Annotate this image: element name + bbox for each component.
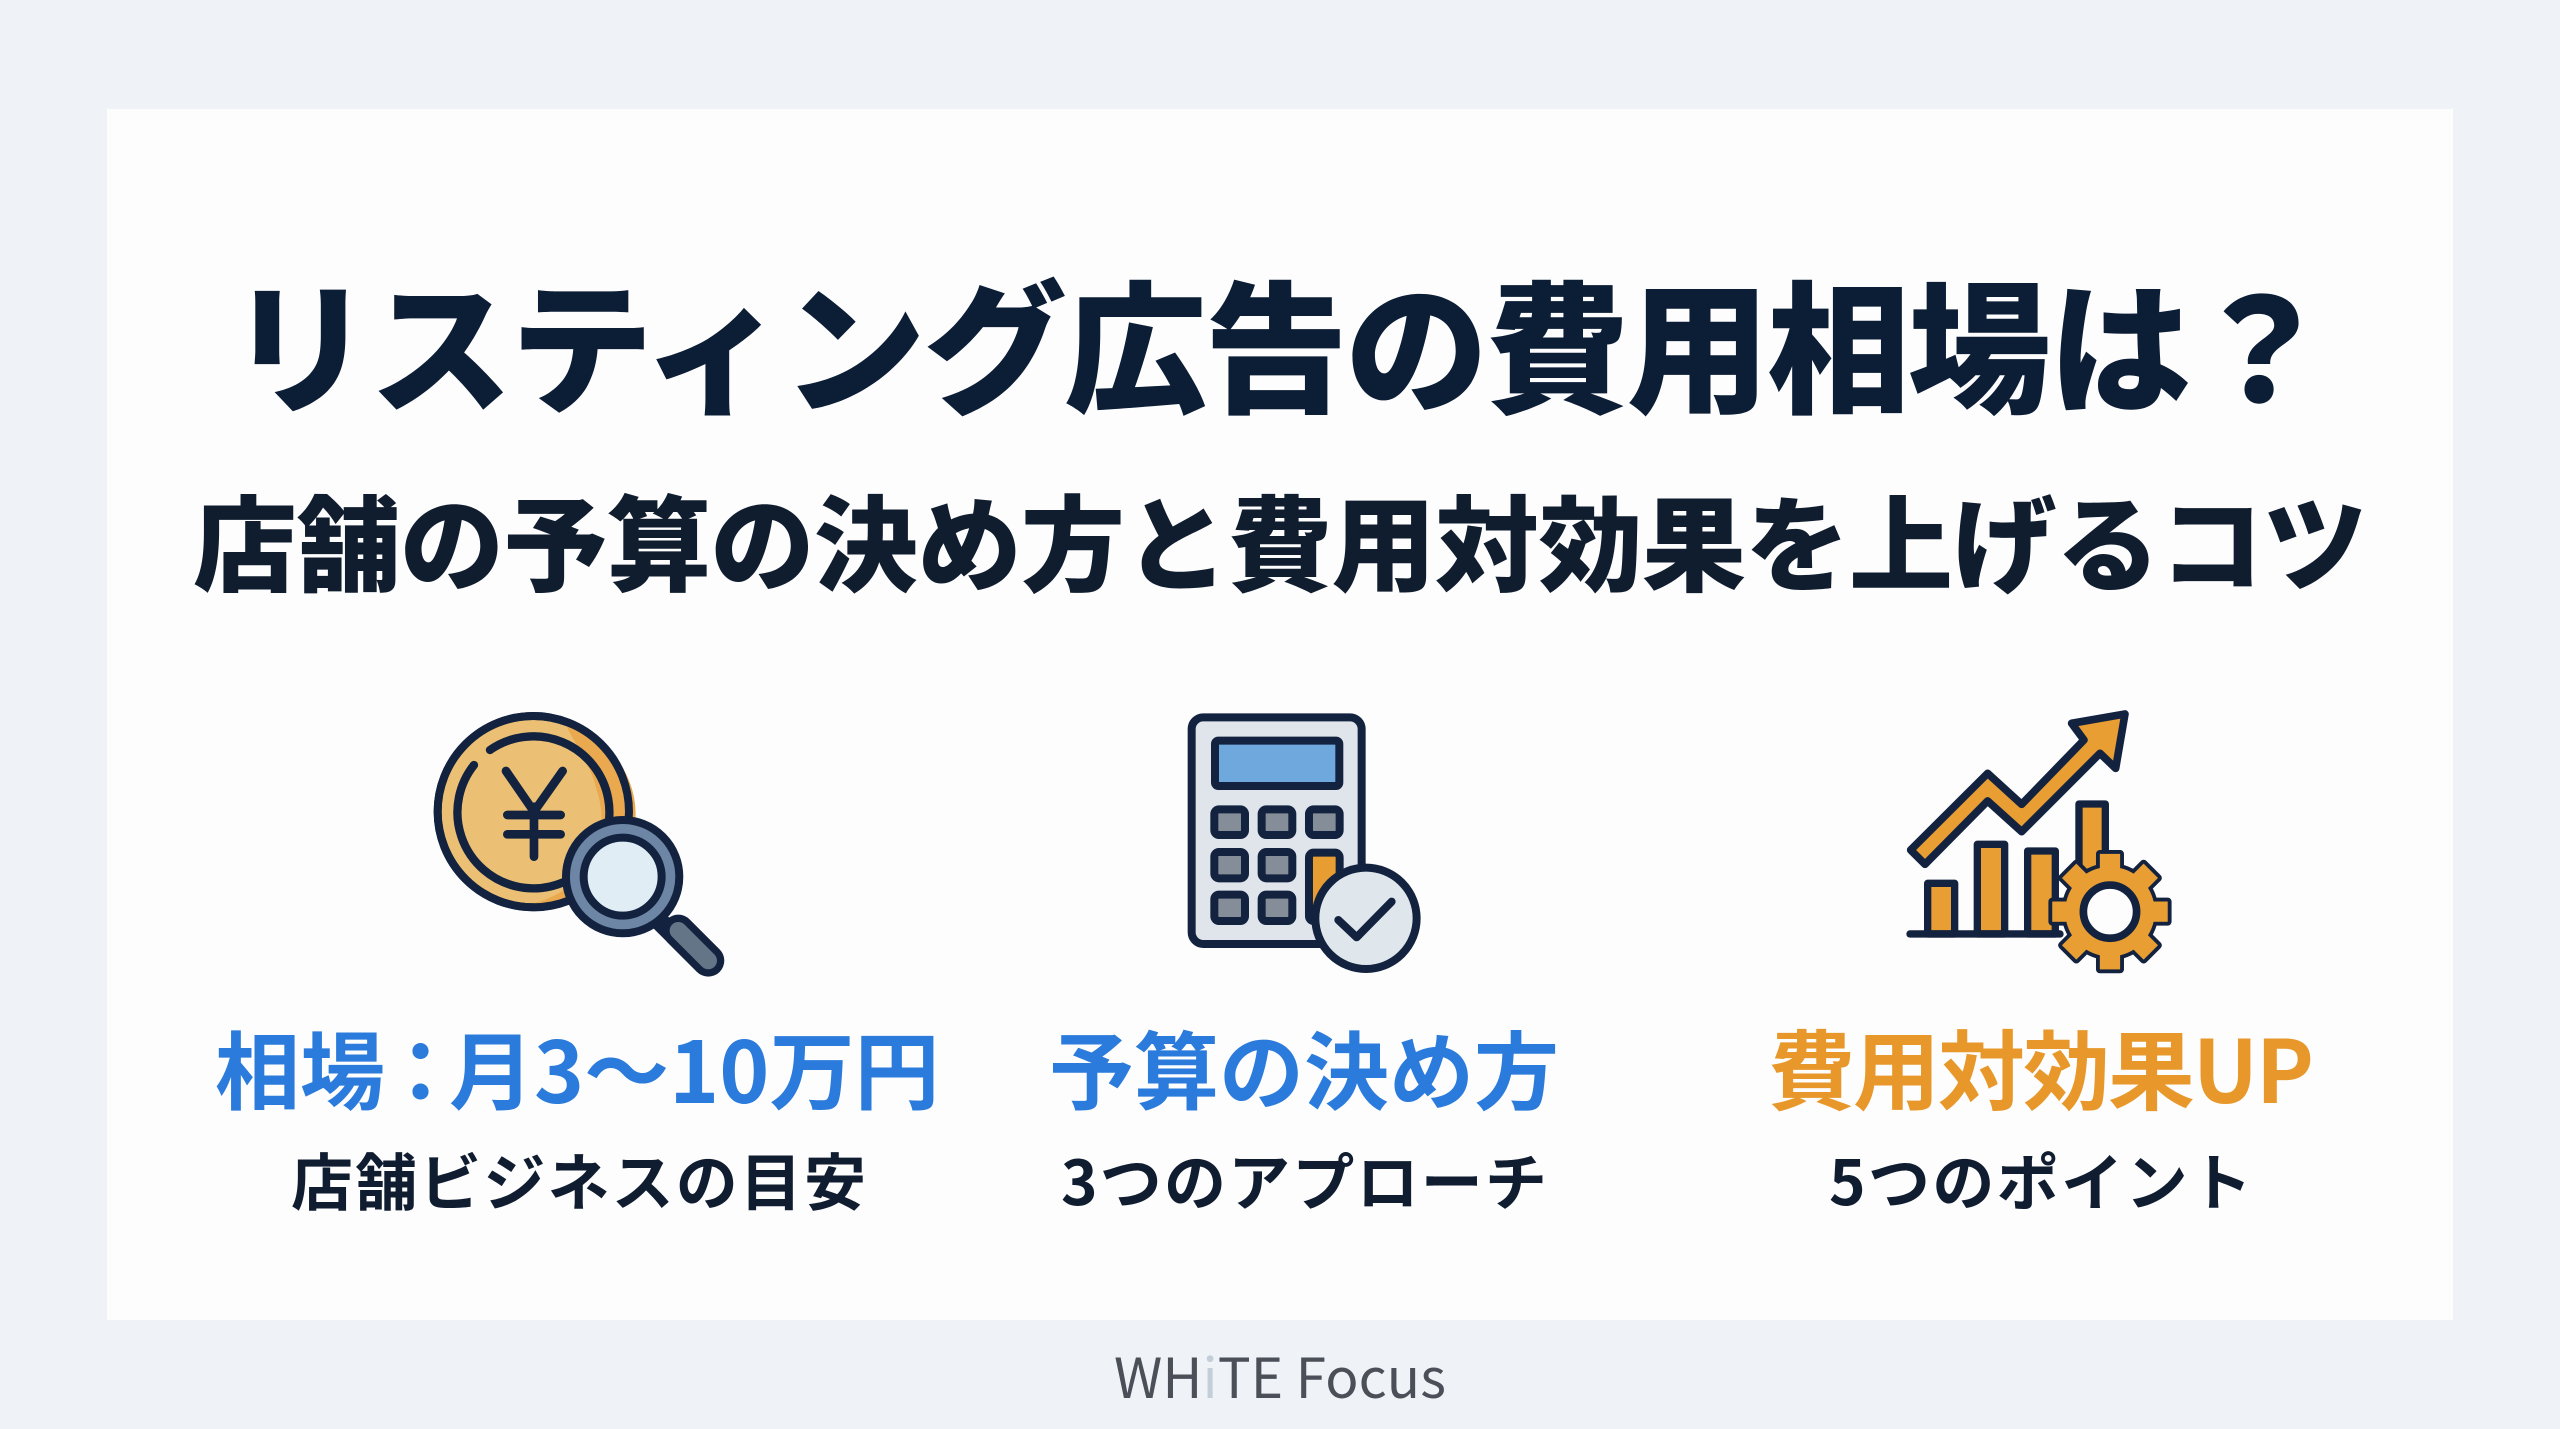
text: market price caption: 店舗ビジネスの目安 — [291, 1133, 866, 1223]
heading: market price: 月3〜10万円 — [449, 1005, 939, 1128]
icon: yen coin with magnifier — [438, 716, 708, 961]
text: budget caption: 3つのアプローチ — [1061, 1133, 1547, 1223]
icon: growth chart with gear — [1910, 714, 2168, 969]
text: cost effectiveness caption: 5つのポイント — [1829, 1133, 2252, 1223]
title: リスティング広告の費用相場は？ — [229, 237, 2332, 444]
subtitle: 店舗の予算の決め方と費用対効果を上げるコツ — [193, 462, 2367, 613]
heading: market price: ： — [378, 1005, 463, 1128]
footer logo: WHiTE Focus — [1114, 1334, 1446, 1414]
icon: calculator with check — [1192, 717, 1417, 969]
heading: how to decide budget: 予算の決め方 — [1049, 1005, 1559, 1128]
heading: cost effectiveness up: 費用対効果UP — [1768, 1003, 2314, 1129]
panel: white card — [107, 109, 2453, 1320]
heading: market price: 相場 — [215, 1005, 385, 1128]
